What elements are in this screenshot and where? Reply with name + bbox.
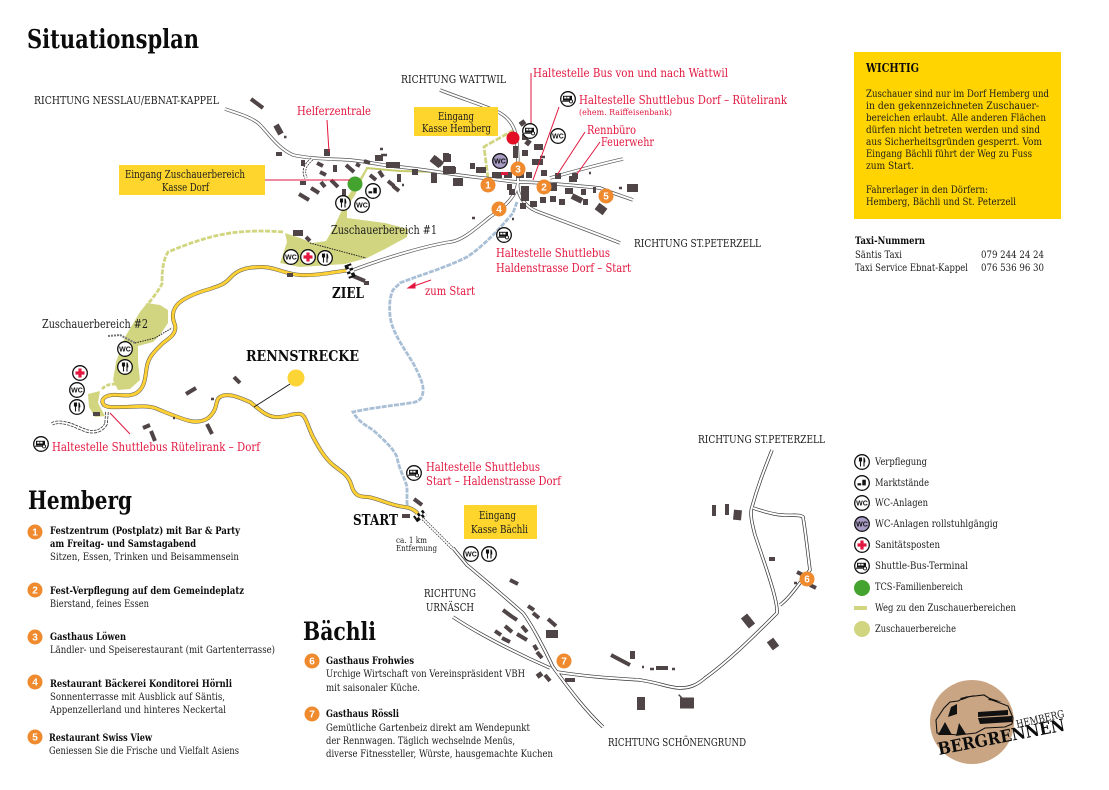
taxi numbers: Taxi Service Ebnat-Kappel xyxy=(855,263,968,274)
path to spectator areas xyxy=(147,231,283,305)
logo: Hemberg Bergrennen: HEMBERG xyxy=(1015,708,1065,731)
red mark: Rennbüro area xyxy=(501,172,508,175)
panel: Bächli list: Urchige Wirtschaft von Vereinspräsident VBH xyxy=(326,669,525,680)
map icons: WC xyxy=(285,254,297,262)
path to area #2 lower xyxy=(102,384,116,389)
panel: important notice: Fahrerlager in den Dörfern: xyxy=(866,185,988,196)
legend: Weg zu den Zuschauerbereichen xyxy=(875,603,1016,614)
panel: important notice: aus Sicherheitsgründen gesperrt. Vom xyxy=(866,137,1042,148)
numbered map markers: 2 xyxy=(541,182,547,194)
panel: Hemberg list: am Freitag- und Samstagabend xyxy=(50,539,196,550)
bold course labels: START xyxy=(353,512,398,529)
numbered map markers: 4 xyxy=(496,204,502,216)
panel: Hemberg list: 1 xyxy=(32,528,38,538)
dashed access roads xyxy=(52,159,453,549)
legend: WC-Anlagen rollstuhlgängig xyxy=(875,519,999,530)
panel: Hemberg list: Ländler- und Speiserestaurant (mit Gartenterrasse) xyxy=(50,645,275,656)
map icons: WC xyxy=(71,388,83,394)
legend: TCS-Familienbereich xyxy=(875,582,963,593)
panel: important notice: zum Start. xyxy=(866,161,914,172)
spectator area #2 xyxy=(88,303,168,417)
entrance label: Kasse Dorf: Eingang Zuschauerbereich xyxy=(125,168,245,181)
title: Situationsplan xyxy=(27,25,199,55)
panel: important notice: dürfen nicht betreten werden und sind xyxy=(866,125,1041,136)
red stop labels: Haltestelle Shuttlebus Rütelirank – Dorf xyxy=(52,440,261,454)
finish flag xyxy=(344,263,356,279)
panel: important notice: Hemberg, Bächli und St. Peterzell xyxy=(866,197,1016,208)
panel: Bächli list: Bächli xyxy=(303,617,376,646)
map icons: WC xyxy=(465,552,477,558)
taxi numbers: Taxi-Nummern xyxy=(855,236,926,247)
panel: Hemberg list xyxy=(28,486,275,757)
panel: Hemberg list: Restaurant Swiss View xyxy=(49,733,152,744)
taxi numbers: 076 536 96 30 xyxy=(981,263,1044,274)
entrance label: Kasse Hemberg xyxy=(414,107,498,136)
panel: Bächli list: Gemütliche Gartenbeiz direkt am Wendepunkt xyxy=(326,723,530,734)
map icons: WC xyxy=(119,346,131,354)
panel: important notice: Eingang Bächli führt der Weg zu Fuss xyxy=(866,149,1032,160)
red stop labels: Haltestelle Shuttlebus xyxy=(426,460,540,474)
panel: Hemberg list: Gasthaus Löwen xyxy=(50,632,127,643)
entrance label: Kasse Bächli: Kasse Bächli xyxy=(471,523,528,536)
red stop labels xyxy=(52,66,788,488)
panel: Bächli list xyxy=(303,617,553,760)
taxi numbers xyxy=(855,236,1044,274)
panel: Hemberg list: Sitzen, Essen, Trinken und Beisammensein xyxy=(50,552,239,563)
direction labels: URNÄSCH xyxy=(426,600,474,614)
panel: Bächli list: Gasthaus Rössli xyxy=(326,709,399,720)
panel: important notice: WICHTIG xyxy=(865,61,919,75)
entrance label: Kasse Hemberg: Kasse Hemberg xyxy=(422,122,491,135)
map icons: WC xyxy=(356,202,368,210)
panel: Hemberg list: Sonnenterrasse mit Ausblick auf Säntis, xyxy=(50,692,225,703)
panel: Hemberg list: Bierstand, feines Essen xyxy=(50,599,149,610)
panel: Bächli list: diverse Fitnessteller, Würste, hausgemachte Kuchen xyxy=(326,749,553,760)
panel: important notice: in den gekennzeichneten Zuschauer- xyxy=(866,101,1039,112)
panel: Hemberg list: Restaurant Bäckerei Konditorei Hörnli xyxy=(50,679,232,690)
path near Kasse Hemberg xyxy=(484,130,514,178)
panel: Hemberg list: 4 xyxy=(32,678,38,688)
numbered map markers: 5 xyxy=(603,192,609,202)
race track leader line xyxy=(254,384,290,407)
panel: Hemberg list: Appenzellerland und hinteres Neckertal xyxy=(49,705,226,716)
legend: WC xyxy=(856,500,868,508)
map: Hemberg area and race course xyxy=(34,66,826,749)
direction labels: Entfernung xyxy=(396,544,437,553)
numbered map markers: 3 xyxy=(515,164,521,176)
bold course labels: RENNSTRECKE xyxy=(246,348,359,365)
panel: Bächli list: 7 xyxy=(309,710,315,720)
panel: Bächli list: mit saisonaler Küche. xyxy=(326,683,420,694)
numbered map markers: 7 xyxy=(561,656,567,668)
legend: WC xyxy=(856,522,868,528)
panel: important notice xyxy=(854,52,1061,219)
red stop labels: Rennbüro xyxy=(587,123,636,137)
taxi numbers: 079 244 24 24 xyxy=(981,250,1044,261)
panel: Hemberg list: Geniessen Sie die Frische und Vielfalt Asiens xyxy=(49,746,239,757)
village path along main road xyxy=(366,168,486,178)
map icons xyxy=(34,92,575,561)
taxi numbers: Säntis Taxi xyxy=(855,250,902,261)
legend: Verpflegung xyxy=(874,457,927,468)
direction labels: RICHTUNG WATTWIL xyxy=(401,73,507,86)
panel: Bächli list: 6 xyxy=(309,656,315,668)
legend xyxy=(854,455,1016,637)
legend: Sanitätsposten xyxy=(875,540,940,551)
red stop labels: Feuerwehr xyxy=(601,135,654,149)
panel: important notice: Zuschauer sind nur im Dorf Hemberg und xyxy=(866,89,1050,100)
race track xyxy=(102,267,419,515)
map icons: WC xyxy=(552,134,564,140)
logo: Hemberg Bergrennen xyxy=(930,680,1067,764)
red stop labels: Haldenstrasse Dorf – Start xyxy=(496,261,631,275)
bold course labels xyxy=(246,285,398,529)
spectator area #1 xyxy=(280,167,408,267)
red stop labels: Haltestelle Shuttlebus Dorf – Rütelirank xyxy=(579,93,788,107)
panel: Hemberg list: Fest-Verpflegung auf dem Gemeindeplatz xyxy=(50,586,244,597)
panel: important notice: bereichen erlaubt. Alle anderen Flächen xyxy=(866,113,1046,124)
direction labels: Zuschauerbereich #2 xyxy=(42,317,148,331)
direction labels: RICHTUNG ST.PETERZELL xyxy=(634,237,762,250)
logo: Hemberg Bergrennen: BERGRENNEN xyxy=(936,716,1067,760)
bold course labels: ZIEL xyxy=(332,285,364,302)
direction labels: RICHTUNG NESSLAU/EBNAT-KAPPEL xyxy=(34,94,220,107)
direction labels: ca. 1 km xyxy=(396,536,427,545)
red stop labels: Haltestelle Shuttlebus xyxy=(496,246,610,260)
direction labels: RICHTUNG xyxy=(424,587,476,600)
panel: Hemberg list: Festzentrum (Postplatz) mit Bar & Party xyxy=(50,526,241,537)
red stop labels: zum Start xyxy=(425,284,475,298)
red stop labels: Start – Haldenstrasse Dorf xyxy=(426,474,562,488)
TCS family area dot xyxy=(348,176,362,192)
direction labels: RICHTUNG ST.PETERZELL xyxy=(698,433,826,446)
legend: Zuschauerbereiche xyxy=(875,624,956,635)
map icons: WC xyxy=(494,158,506,166)
entrance label: Kasse Bächli: Eingang xyxy=(479,509,516,522)
direction labels: RICHTUNG SCHÖNENGRUND xyxy=(608,735,746,749)
roads xyxy=(225,90,810,727)
red stop labels: Haltestelle Bus von und nach Wattwil xyxy=(533,66,728,80)
legend: WC-Anlagen xyxy=(875,498,928,509)
red dot: Kasse Hemberg bus stop xyxy=(506,132,520,144)
legend: Marktstände xyxy=(875,478,929,489)
red stop labels: Helferzentrale xyxy=(297,104,371,118)
numbered map markers xyxy=(480,162,814,668)
shuttle route (blue dashed) xyxy=(353,202,517,512)
panel: Bächli list: Gasthaus Frohwies xyxy=(326,656,414,667)
legend: Shuttle-Bus-Terminal xyxy=(875,561,968,572)
panel: Hemberg list: 5 xyxy=(32,732,38,744)
entrance label: Kasse Dorf: Kasse Dorf xyxy=(162,181,210,194)
start flag xyxy=(413,510,427,522)
panel: Hemberg list: Hemberg xyxy=(28,486,132,515)
direction labels: Zuschauerbereich #1 xyxy=(331,223,437,237)
entrance label: Kasse Dorf xyxy=(119,165,265,195)
direction labels xyxy=(34,73,826,749)
entrance label: Kasse Bächli xyxy=(464,505,537,539)
panel: Hemberg list: 2 xyxy=(32,586,38,596)
panel: Bächli list: der Rennwagen. Täglich wechselnde Menüs, xyxy=(326,736,515,747)
panel: Hemberg list: 3 xyxy=(32,632,38,644)
entrance label: Kasse Hemberg: Eingang xyxy=(438,110,474,123)
race track marker xyxy=(288,370,304,386)
red stop labels: (ehem. Raiffeisenbank) xyxy=(579,107,672,118)
red leader lines xyxy=(110,73,600,434)
numbered map markers: 6 xyxy=(804,574,810,586)
numbered map markers: 1 xyxy=(485,180,491,192)
buildings xyxy=(93,99,816,710)
